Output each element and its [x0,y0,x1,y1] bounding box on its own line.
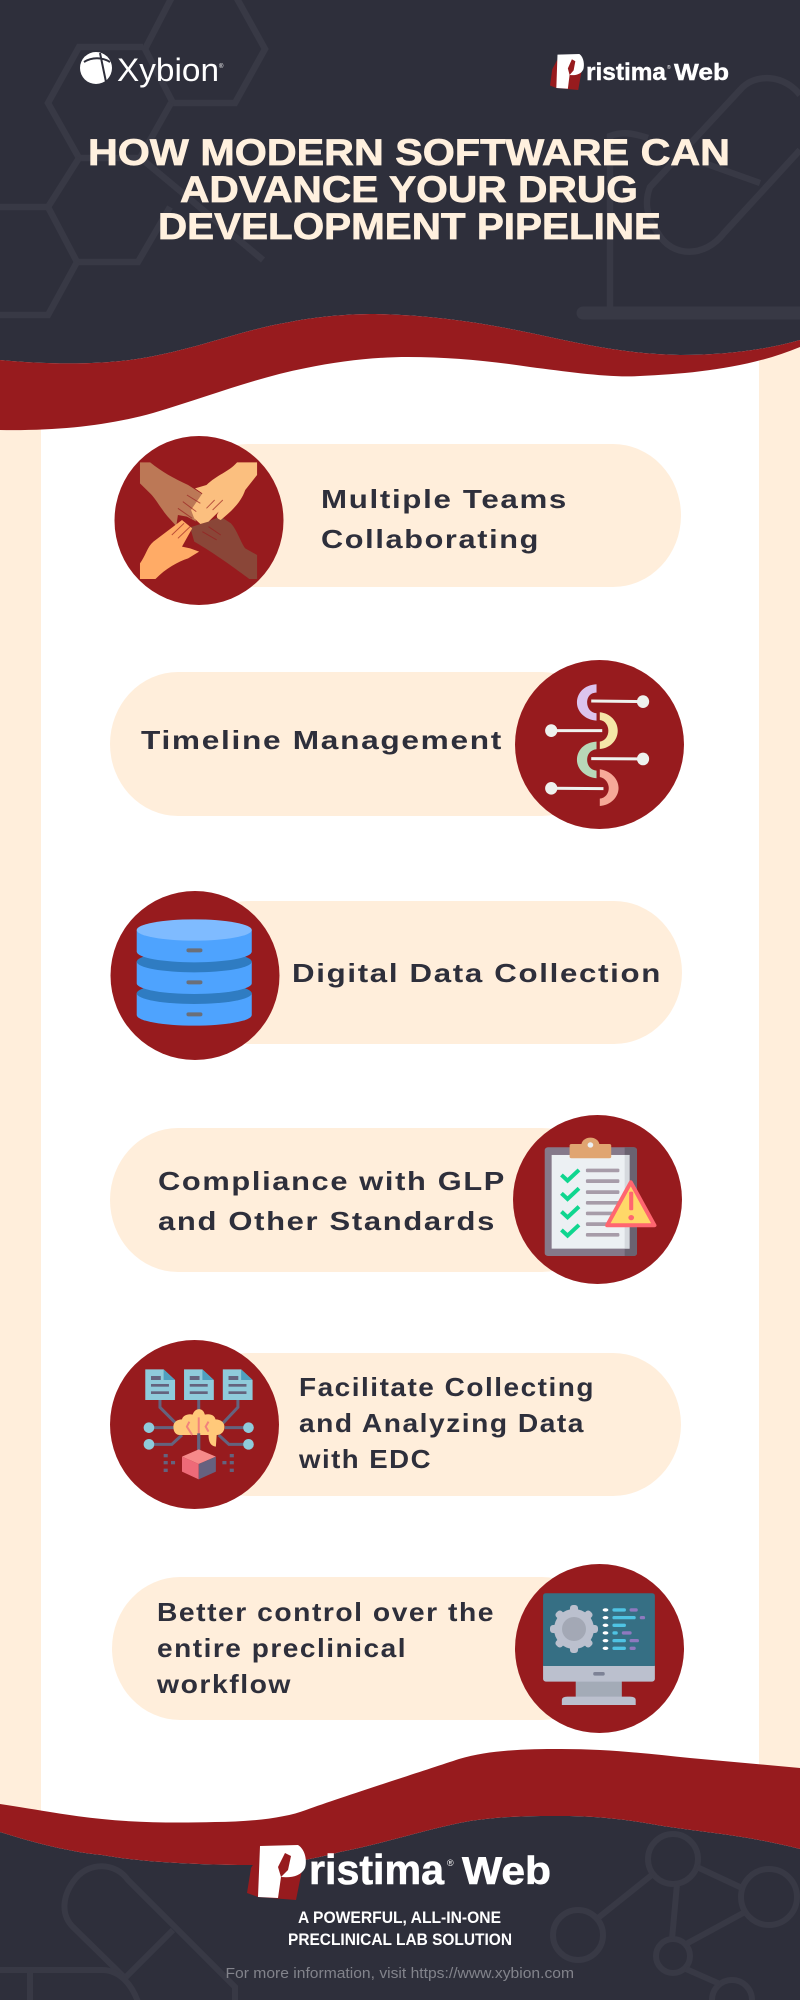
Pristima Web logo footer: Web [462,1850,551,1893]
Pristima Web logo footer: ristima [309,1846,445,1893]
label: Multiple Teams [321,484,568,514]
side bars [0,340,800,1840]
red footer wave [0,1749,800,1865]
item 6: better control [112,1564,684,1733]
icon: database [137,919,252,1026]
tagline: A POWERFUL, ALL-IN-ONE [298,1909,501,1927]
header background [0,0,800,363]
Xybion logo [80,52,224,88]
Pristima Web logo top: ® [667,64,671,71]
title: ADVANCE YOUR DRUG [180,169,638,210]
icon: documents and brain [144,1369,254,1479]
footer link: For more information, visit https://www.xybion.com [226,1965,574,1982]
label: Better control over the [157,1597,495,1627]
icon: timeline [545,684,649,806]
Pristima Web logo footer [247,1845,551,1900]
Pristima Web logo top [550,54,729,90]
tagline: PRECLINICAL LAB SOLUTION [288,1931,512,1949]
label: and Analyzing Data [299,1408,585,1438]
header background pattern [0,0,800,315]
label [321,484,568,554]
Xybion logo: Xybion [117,52,219,88]
Xybion logo: ® [219,63,224,70]
item 4: compliance [110,1115,682,1284]
Pristima Web logo top: ristima [586,59,667,86]
icon: monitor with gear [543,1593,655,1705]
label [298,1372,595,1474]
title: HOW MODERN SOFTWARE CAN [88,132,730,173]
label: entire preclinical [157,1633,407,1663]
item 3: digital data collection [110,891,682,1060]
label: Facilitate Collecting [299,1372,595,1402]
label: and Other Standards [158,1206,496,1236]
label: workflow [156,1669,292,1699]
label [156,1597,495,1699]
label: Timeline Management [141,725,503,755]
title [88,132,730,247]
item 5: facilitate collecting [110,1340,681,1509]
label: Compliance with GLP [158,1166,506,1196]
icon: hands [140,462,257,579]
Pristima Web logo footer: ® [447,1858,454,1868]
red header wave [0,314,800,430]
footer background pattern [0,1834,797,2000]
item 2: timeline management [110,660,684,829]
label [158,1166,506,1236]
footer background [0,1816,800,2000]
label: Collaborating [321,524,540,554]
label: Digital Data Collection [292,958,662,988]
label: with EDC [298,1444,432,1474]
title: DEVELOPMENT PIPELINE [158,206,661,247]
item 1: multiple teams collaborating [114,436,681,605]
Pristima Web logo top: Web [674,59,729,85]
icon: clipboard with warning [545,1138,654,1256]
tagline [288,1909,512,1949]
